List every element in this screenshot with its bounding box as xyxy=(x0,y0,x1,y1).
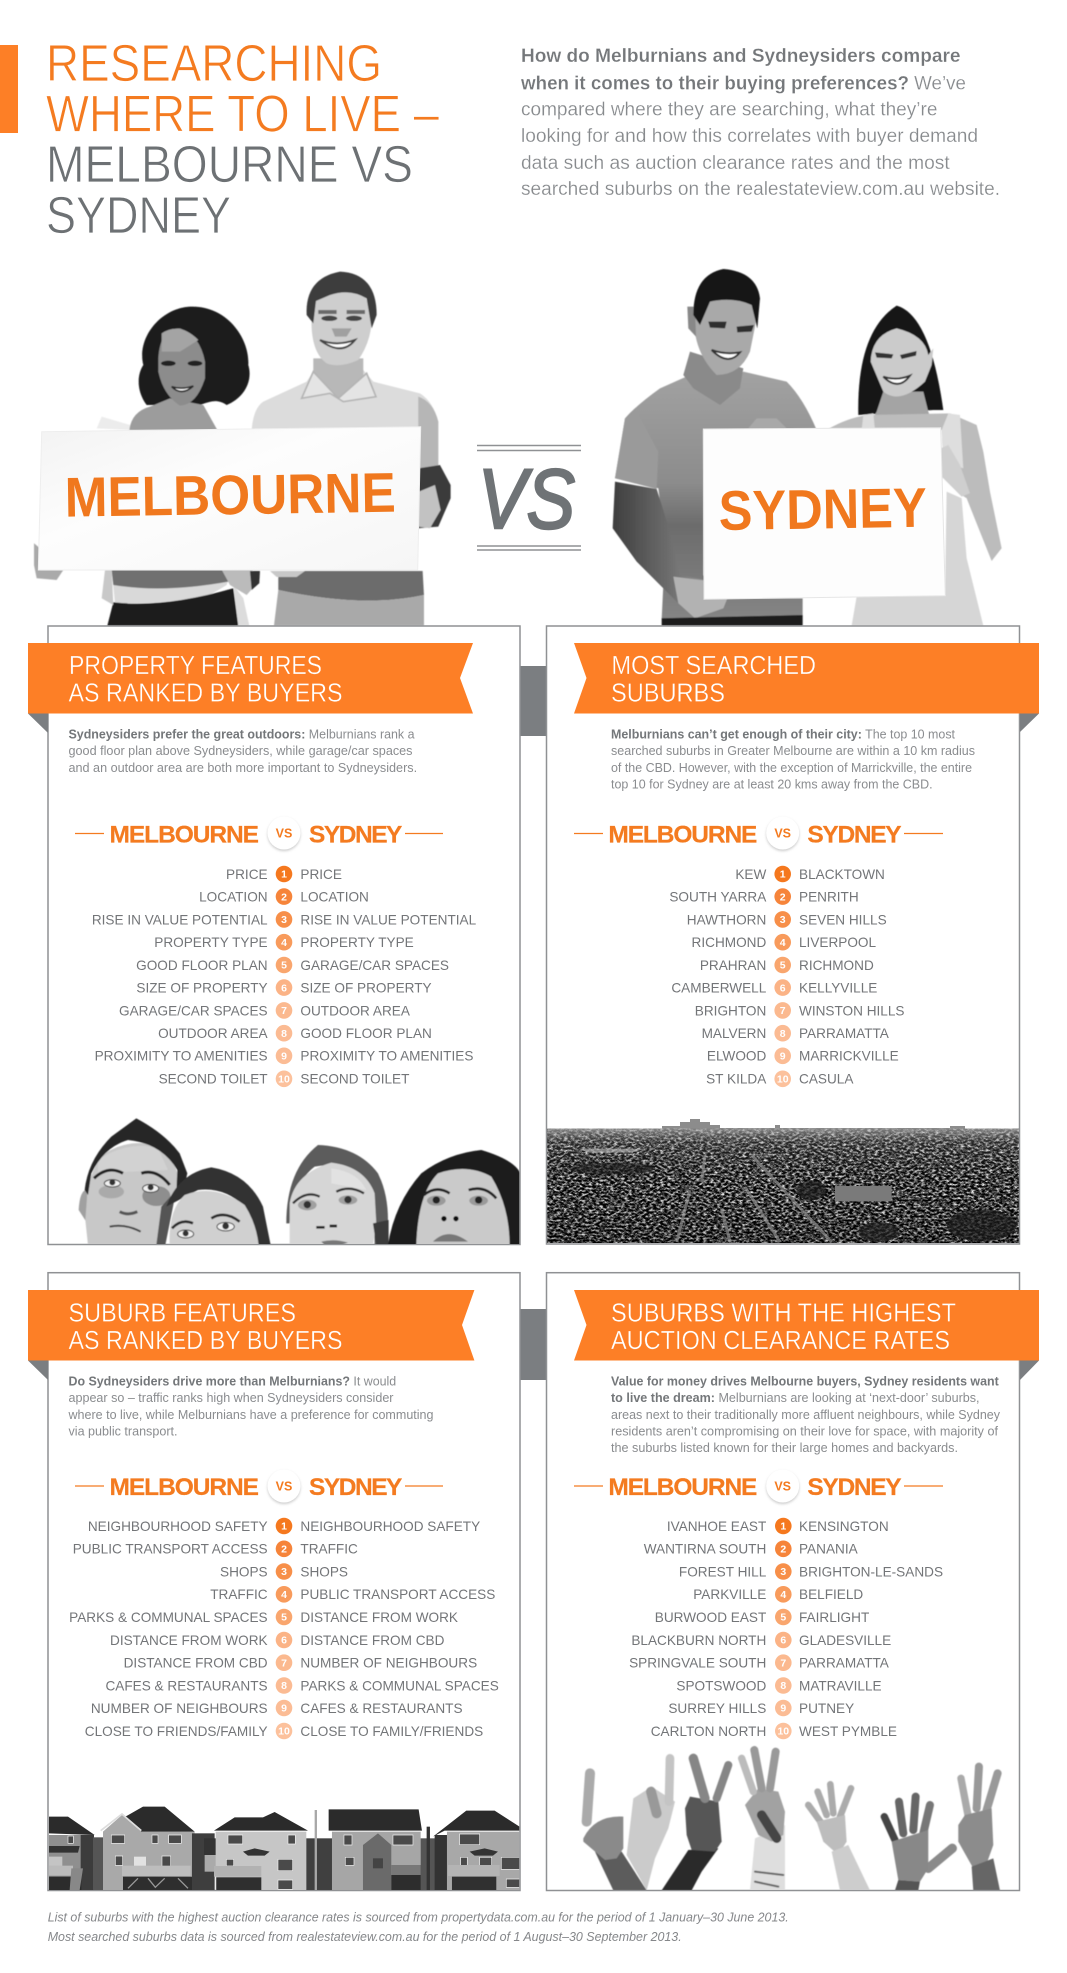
ranked list: Sydney column xyxy=(799,867,904,1087)
ribbon heading: SUBURB FEATURES xyxy=(68,1300,296,1328)
ranked list: Sydney column: CLOSE TO FAMILY/FRIENDS xyxy=(300,1724,483,1739)
ranked list: Melbourne column: SURREY HILLS xyxy=(668,1701,766,1716)
ranked list: Sydney column: MATRAVILLE xyxy=(799,1678,882,1693)
intro text: when it comes to their buying preferences? We’ve xyxy=(520,73,966,94)
ribbon heading: SUBURBS WITH THE HIGHEST xyxy=(611,1300,956,1328)
description: areas next to their traditionally more affluent neighbours, while Sydney xyxy=(611,1408,1001,1422)
ranked list: Sydney column: KENSINGTON xyxy=(799,1519,889,1534)
ranked list: Melbourne column: ELWOOD xyxy=(707,1049,766,1064)
ranked list: Melbourne column: SHOPS xyxy=(220,1564,268,1579)
ranked list: Melbourne column xyxy=(69,1519,268,1739)
footnote sources: List of suburbs with the highest auction clearance rates is sourced from propertydata.com.au for the period of 1 January–30 June 2013. xyxy=(48,1910,789,1924)
rank numbers xyxy=(276,1518,292,1739)
ranked list: Sydney column: DISTANCE FROM CBD xyxy=(300,1633,445,1648)
photo: Melbourne couple with sign xyxy=(34,272,451,626)
ranked list: Melbourne column: PARKVILLE xyxy=(693,1587,766,1602)
rank numbers: 8 xyxy=(281,1028,287,1040)
rank numbers: 1 xyxy=(780,869,786,881)
ranked list: Melbourne column: RICHMOND xyxy=(692,935,766,950)
panel: auction clearance rates xyxy=(546,1273,1039,1890)
ranked list: Sydney column xyxy=(300,867,477,1087)
connector: top row xyxy=(520,666,547,736)
ranked list: Melbourne column: SIZE OF PROPERTY xyxy=(136,980,268,996)
ranked list: Melbourne column: PRICE xyxy=(226,867,268,882)
footnote sources: Most searched suburbs data is sourced from realestateview.com.au for the period of 1 August–30 September 2013. xyxy=(48,1929,682,1944)
rank numbers: 1 xyxy=(281,869,287,881)
ranked list: Sydney column xyxy=(799,1519,943,1739)
rank numbers: 7 xyxy=(780,1657,786,1669)
ranked list: Melbourne column: BLACKBURN NORTH xyxy=(631,1633,766,1648)
ranked list: Sydney column: PUBLIC TRANSPORT ACCESS xyxy=(300,1587,495,1602)
ranked list: Melbourne column xyxy=(629,1519,767,1739)
ribbon heading xyxy=(574,643,1039,714)
ribbon heading xyxy=(28,1290,474,1360)
rank numbers: 8 xyxy=(281,1680,287,1692)
title xyxy=(46,35,439,245)
description: to live the dream: Melburnians are looking at ‘next-door’ suburbs, xyxy=(611,1391,980,1405)
ranked list: Melbourne column: BURWOOD EAST xyxy=(655,1610,766,1625)
ranked list: Melbourne column xyxy=(92,867,269,1087)
ranked list: Melbourne column: SPOTSWOOD xyxy=(676,1678,766,1693)
rank numbers: 4 xyxy=(281,1589,287,1601)
photo: Sydney couple with sign xyxy=(613,269,1002,626)
rank numbers: 3 xyxy=(281,1566,287,1578)
panel: property features xyxy=(28,626,520,1245)
intro text: How do Melburnians and Sydneysiders compare xyxy=(521,46,960,67)
description: Do Sydneysiders drive more than Melburnians? It would xyxy=(68,1374,396,1388)
intro text: searched suburbs on the realestateview.com.au website. xyxy=(521,179,1000,200)
ranked list: Melbourne column: MALVERN xyxy=(702,1026,766,1041)
rank numbers: 7 xyxy=(780,1005,786,1017)
description: top 10 for Sydney are at least 20 kms away from the CBD. xyxy=(611,778,933,792)
ranked list: Sydney column: NUMBER OF NEIGHBOURS xyxy=(300,1656,477,1671)
ranked list: Melbourne column: CLOSE TO FRIENDS/FAMILY xyxy=(85,1724,268,1739)
rank numbers: 7 xyxy=(281,1005,287,1017)
rank numbers: 9 xyxy=(780,1703,786,1715)
ranked list: Melbourne column: SPRINGVALE SOUTH xyxy=(629,1656,766,1671)
description xyxy=(68,727,417,775)
ribbon fold xyxy=(1020,714,1039,732)
ribbon fold xyxy=(28,1360,48,1380)
connector: bottom row xyxy=(520,1309,547,1380)
rank numbers: 8 xyxy=(780,1028,786,1040)
vs header: VS xyxy=(276,826,292,840)
ranked list: Sydney column: PUTNEY xyxy=(799,1701,854,1716)
rank numbers: 9 xyxy=(281,1703,287,1715)
ribbon heading: AS RANKED BY BUYERS xyxy=(68,680,342,708)
ranked list: Melbourne column: WANTIRNA SOUTH xyxy=(644,1542,766,1557)
vs header: MELBOURNE xyxy=(608,822,757,848)
accent bar xyxy=(0,45,18,133)
sign text: SYDNEY xyxy=(718,476,927,542)
vs header xyxy=(75,1470,443,1504)
ranked list: Melbourne column: PROXIMITY TO AMENITIES xyxy=(95,1049,268,1064)
ranked list: Sydney column: SECOND TOILET xyxy=(300,1072,409,1087)
ribbon heading: SUBURBS xyxy=(611,680,725,708)
ranked list: Melbourne column: SECOND TOILET xyxy=(159,1072,268,1087)
ranked list: Sydney column: PROXIMITY TO AMENITIES xyxy=(300,1049,473,1064)
description xyxy=(611,727,975,792)
ribbon fold xyxy=(28,714,48,733)
description: appear so – traffic ranks high when Sydneysiders consider xyxy=(68,1391,394,1405)
rank numbers: 5 xyxy=(281,1612,287,1624)
title: RESEARCHING xyxy=(46,35,382,93)
ribbon heading: AUCTION CLEARANCE RATES xyxy=(611,1327,950,1355)
vs header: SYDNEY xyxy=(807,822,902,848)
vs graphic xyxy=(477,446,581,550)
ribbon heading: PROPERTY FEATURES xyxy=(69,652,322,680)
ranked list: Sydney column: RICHMOND xyxy=(799,958,874,973)
title: WHERE TO LIVE – xyxy=(46,85,439,143)
Melbourne sign xyxy=(38,427,421,570)
rank numbers: 5 xyxy=(780,1612,786,1624)
rank numbers: 6 xyxy=(281,1635,287,1647)
ranked list: Melbourne column: CARLTON NORTH xyxy=(651,1724,766,1739)
photo: hands counting xyxy=(583,1750,1000,1890)
ranked list: Melbourne column: CAMBERWELL xyxy=(671,980,767,996)
Sydney sign xyxy=(703,428,945,599)
description: via public transport. xyxy=(68,1425,178,1439)
sign text: MELBOURNE xyxy=(64,461,396,529)
vs header: MELBOURNE xyxy=(110,1474,259,1501)
rank numbers xyxy=(774,866,791,1087)
rank numbers: 7 xyxy=(281,1657,287,1669)
rank numbers: 4 xyxy=(281,937,287,949)
description: the suburbs listed known for their large homes and backyards. xyxy=(611,1441,958,1455)
ranked list: Sydney column: CASULA xyxy=(799,1072,854,1087)
rank numbers: 10 xyxy=(278,1726,290,1738)
ranked list: Sydney column: PRICE xyxy=(300,867,342,882)
rank numbers: 1 xyxy=(281,1521,287,1533)
description xyxy=(611,1374,1001,1455)
ranked list: Sydney column: BLACKTOWN xyxy=(799,867,885,882)
vs header: MELBOURNE xyxy=(110,822,259,848)
intro text xyxy=(520,46,1000,200)
ranked list: Melbourne column: OUTDOOR AREA xyxy=(158,1026,269,1041)
ranked list: Sydney column: LIVERPOOL xyxy=(799,935,877,950)
vs header: SYDNEY xyxy=(309,1474,402,1501)
rank numbers: 9 xyxy=(780,1050,786,1062)
ranked list: Sydney column: GOOD FLOOR PLAN xyxy=(300,1026,432,1041)
ranked list: Sydney column: MARRICKVILLE xyxy=(799,1049,899,1064)
ranked list: Sydney column: DISTANCE FROM WORK xyxy=(300,1610,458,1625)
ranked list: Melbourne column: NEIGHBOURHOOD SAFETY xyxy=(88,1519,268,1534)
intro text: compared where they are searching, what they’re xyxy=(521,100,937,120)
rank numbers: 10 xyxy=(777,1074,789,1086)
description: good floor plan above Sydneysiders, while garage/car spaces xyxy=(68,744,412,758)
ranked list: Melbourne column: RISE IN VALUE POTENTIAL xyxy=(92,912,268,927)
rank numbers: 3 xyxy=(780,914,786,926)
intro text: data such as auction clearance rates and the most xyxy=(521,153,950,174)
rank numbers: 6 xyxy=(780,1635,786,1647)
ranked list: Melbourne column: GARAGE/CAR SPACES xyxy=(119,1003,268,1018)
ranked list: Sydney column: SHOPS xyxy=(300,1564,348,1579)
rank numbers: 2 xyxy=(281,891,287,903)
vs header xyxy=(574,816,943,851)
rank numbers: 8 xyxy=(780,1680,786,1692)
description: Melburnians can’t get enough of their city: The top 10 most xyxy=(611,727,955,741)
ranked list: Sydney column: SEVEN HILLS xyxy=(799,912,887,927)
description: where to live, while Melburnians have a preference for commuting xyxy=(68,1408,434,1422)
ranked list: Sydney column: PENRITH xyxy=(799,890,859,904)
ranked list: Melbourne column: LOCATION xyxy=(199,890,268,904)
ribbon fold xyxy=(1020,1360,1039,1380)
ranked list: Melbourne column: PRAHRAN xyxy=(700,958,766,973)
vs header xyxy=(574,1470,943,1504)
ranked list: Melbourne column: SOUTH YARRA xyxy=(669,890,767,904)
rank numbers: 6 xyxy=(281,982,287,994)
rank numbers: 2 xyxy=(780,891,786,903)
ranked list: Melbourne column: ST KILDA xyxy=(706,1072,767,1087)
description: residents aren’t compromising on their love for space, with majority of xyxy=(611,1425,998,1439)
ribbon heading: MOST SEARCHED xyxy=(612,652,816,680)
ranked list: Sydney column: PARRAMATTA xyxy=(799,1026,890,1041)
ranked list: Sydney column: LOCATION xyxy=(300,890,369,904)
description: Value for money drives Melbourne buyers, Sydney residents want xyxy=(611,1374,999,1388)
rank numbers: 4 xyxy=(780,937,786,949)
vs header: SYDNEY xyxy=(309,822,402,848)
ribbon heading: AS RANKED BY BUYERS xyxy=(68,1327,342,1355)
intro text: looking for and how this correlates with buyer demand xyxy=(521,126,978,147)
ranked list: Melbourne column: CAFES & RESTAURANTS xyxy=(105,1678,268,1693)
ranked list: Sydney column: BRIGHTON-LE-SANDS xyxy=(799,1564,943,1579)
rank numbers: 2 xyxy=(780,1544,786,1556)
panel: most searched suburbs xyxy=(546,626,1039,1244)
photo: city skyline xyxy=(547,1119,1020,1244)
ranked list: Sydney column: WINSTON HILLS xyxy=(799,1003,904,1018)
ranked list: Sydney column: BELFIELD xyxy=(799,1587,863,1602)
rank numbers: 3 xyxy=(281,914,287,926)
vs header: MELBOURNE xyxy=(608,1474,757,1501)
ranked list: Melbourne column: KEW xyxy=(735,867,766,882)
ranked list: Melbourne column: GOOD FLOOR PLAN xyxy=(136,958,268,973)
ranked list: Sydney column: GARAGE/CAR SPACES xyxy=(300,958,449,973)
ranked list: Sydney column: TRAFFIC xyxy=(300,1542,358,1557)
vs header: VS xyxy=(774,826,791,840)
ranked list: Sydney column: OUTDOOR AREA xyxy=(300,1003,411,1018)
vs header xyxy=(75,816,443,851)
description xyxy=(68,1374,434,1439)
title: MELBOURNE VS xyxy=(46,136,413,194)
ranked list: Melbourne column: PUBLIC TRANSPORT ACCESS xyxy=(73,1542,268,1557)
description: of the CBD. However, with the exception of Marrickville, the entire xyxy=(611,761,972,775)
description: searched suburbs in Greater Melbourne are within a 10 km radius xyxy=(611,744,975,758)
rank numbers: 4 xyxy=(780,1589,786,1601)
vs header: VS xyxy=(774,1480,791,1494)
title: SYDNEY xyxy=(46,187,231,245)
photo: people looking up xyxy=(79,1118,520,1245)
description: Sydneysiders prefer the great outdoors: Melburnians rank a xyxy=(68,727,414,741)
ranked list: Sydney column: FAIRLIGHT xyxy=(799,1610,869,1625)
ranked list: Sydney column: SIZE OF PROPERTY xyxy=(300,980,432,996)
ranked list: Melbourne column: PARKS & COMMUNAL SPACES xyxy=(69,1610,268,1625)
ranked list: Melbourne column: BRIGHTON xyxy=(695,1003,766,1018)
vs lettering: VS xyxy=(478,452,575,546)
rank numbers: 10 xyxy=(278,1074,290,1086)
rank numbers: 3 xyxy=(780,1566,786,1578)
ranked list: Melbourne column: HAWTHORN xyxy=(687,912,766,927)
ranked list: Sydney column: WEST PYMBLE xyxy=(799,1724,897,1739)
vs header: SYDNEY xyxy=(807,1474,902,1501)
ranked list: Melbourne column xyxy=(669,867,767,1087)
ranked list: Sydney column: NEIGHBOURHOOD SAFETY xyxy=(300,1519,480,1534)
ranked list: Melbourne column: DISTANCE FROM CBD xyxy=(124,1656,268,1671)
ranked list: Sydney column: PROPERTY TYPE xyxy=(300,935,414,950)
rank numbers xyxy=(276,866,292,1087)
ranked list: Sydney column: CAFES & RESTAURANTS xyxy=(300,1701,463,1716)
ranked list: Melbourne column: PROPERTY TYPE xyxy=(154,935,268,950)
ranked list: Sydney column xyxy=(300,1519,499,1739)
rank numbers: 6 xyxy=(780,982,786,994)
rank numbers xyxy=(775,1518,792,1739)
description: and an outdoor area are both more important to Sydneysiders. xyxy=(68,761,417,775)
ranked list: Sydney column: GLADESVILLE xyxy=(799,1633,891,1648)
ranked list: Melbourne column: TRAFFIC xyxy=(210,1587,268,1602)
ranked list: Sydney column: PANANIA xyxy=(799,1542,859,1557)
ranked list: Melbourne column: NUMBER OF NEIGHBOURS xyxy=(91,1701,268,1716)
rank numbers: 9 xyxy=(281,1050,287,1062)
rank numbers: 2 xyxy=(281,1544,287,1556)
ribbon heading xyxy=(28,643,473,714)
ranked list: Sydney column: RISE IN VALUE POTENTIAL xyxy=(300,912,477,927)
ribbon heading xyxy=(574,1290,1039,1360)
rank numbers: 5 xyxy=(281,960,287,972)
rank numbers: 1 xyxy=(780,1521,786,1533)
vs header: VS xyxy=(276,1480,292,1494)
ranked list: Sydney column: PARRAMATTA xyxy=(799,1656,890,1671)
footnote sources xyxy=(48,1910,789,1944)
rank numbers: 10 xyxy=(777,1726,789,1738)
panel: suburb features xyxy=(28,1273,520,1890)
ranked list: Melbourne column: DISTANCE FROM WORK xyxy=(110,1633,268,1648)
ranked list: Sydney column: KELLYVILLE xyxy=(799,980,877,996)
rank numbers: 5 xyxy=(780,960,786,972)
photo: row of houses xyxy=(49,1807,520,1890)
ranked list: Sydney column: PARKS & COMMUNAL SPACES xyxy=(300,1678,499,1693)
ranked list: Melbourne column: IVANHOE EAST xyxy=(667,1519,766,1534)
ranked list: Melbourne column: FOREST HILL xyxy=(679,1564,767,1579)
